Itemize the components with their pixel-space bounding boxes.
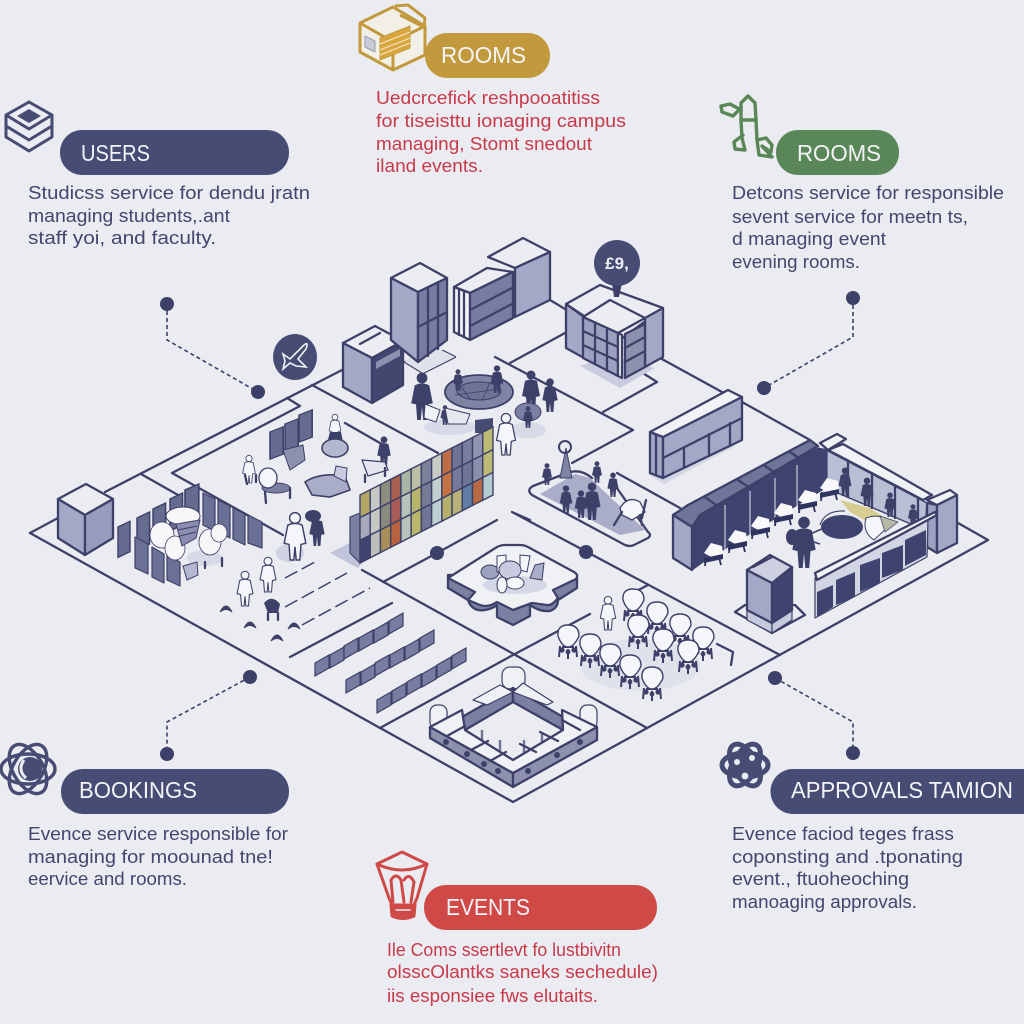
cabinet: grid locker xyxy=(391,263,455,373)
posts xyxy=(482,730,542,753)
chair block xyxy=(558,589,733,701)
row 1 xyxy=(315,613,403,676)
pill heading: USERS xyxy=(81,140,150,166)
description: staff yoi, and faculty. xyxy=(28,228,216,248)
tower cabinet xyxy=(735,555,805,633)
description: evening rooms. xyxy=(732,252,860,272)
seat top xyxy=(430,710,597,773)
description: olsscOlantks saneks sechedule) xyxy=(387,962,658,982)
description: iis esponsiee fws elutaits. xyxy=(387,986,598,1006)
box: double door cabinet xyxy=(566,285,663,388)
description: event., ftuoheoching xyxy=(732,869,909,889)
connector nodes on the floor xyxy=(430,545,593,560)
description: manoaging approvals. xyxy=(732,892,917,912)
platform top xyxy=(448,545,577,610)
box: mailbox cabinet xyxy=(343,326,403,403)
wall: coloured locker grid xyxy=(330,427,493,568)
description: managing students,.ant xyxy=(28,206,230,226)
connector: users xyxy=(160,297,265,399)
description xyxy=(387,940,658,1006)
outlets xyxy=(443,739,583,774)
pill heading: APPROVALS TAMION xyxy=(791,777,1013,803)
description xyxy=(376,88,626,176)
icon: atom xyxy=(1,738,55,800)
corner chairs xyxy=(502,667,525,689)
icon: price bubble xyxy=(594,240,640,297)
description: d managing event xyxy=(732,229,886,249)
icon: molecule xyxy=(722,739,768,791)
panel: users xyxy=(6,102,310,248)
description xyxy=(28,183,310,248)
puzzle platform with meeting table xyxy=(448,545,577,625)
end post xyxy=(927,490,957,553)
platform side xyxy=(448,575,577,625)
connector: approvals xyxy=(768,671,860,760)
icon: price bubble: £9, xyxy=(605,254,629,273)
row 3 xyxy=(377,648,466,713)
description: Studicss service for dendu jratn xyxy=(28,183,310,203)
pill heading xyxy=(425,33,550,78)
description xyxy=(28,824,288,889)
icon: open box xyxy=(360,5,425,70)
people: walkway xyxy=(220,510,325,641)
connector: bookings xyxy=(160,670,257,761)
front sides xyxy=(430,727,597,787)
description: Detcons service for responsible xyxy=(732,183,1004,203)
description: eervice and rooms. xyxy=(28,869,187,889)
pill heading: EVENTS xyxy=(446,894,530,920)
pill heading xyxy=(776,130,899,175)
panel: events xyxy=(377,852,658,1006)
pill heading xyxy=(424,885,657,930)
description: Evence service responsible for xyxy=(28,824,288,844)
panel: approvals xyxy=(722,739,1024,912)
meeting cluster xyxy=(481,555,547,594)
pill heading: ROOMS xyxy=(441,42,526,68)
panel: rooms gold xyxy=(360,5,626,176)
seating rows xyxy=(315,613,466,713)
description: Evence faciod teges frass xyxy=(732,824,954,844)
wall: storage xyxy=(648,390,742,484)
description: managing for moounad tne! xyxy=(28,847,273,867)
description: sevent service for meetn ts, xyxy=(732,207,968,227)
description xyxy=(732,183,1004,272)
central table xyxy=(786,500,898,568)
icon: light bulb xyxy=(377,852,427,918)
room: right classroom xyxy=(673,434,957,618)
panel: rooms green xyxy=(721,96,1004,272)
description: managing, Stomt snedout xyxy=(376,134,592,154)
description: Ile Coms ssertlevt fo lustbivitn xyxy=(387,940,621,960)
floor outline and room dividers xyxy=(30,300,988,802)
inner walls xyxy=(462,688,513,730)
pill heading xyxy=(60,130,289,175)
icon: bamboo branch xyxy=(721,96,772,157)
isometric floor plan xyxy=(30,238,988,802)
cabinet: back block xyxy=(488,238,550,317)
icon: layered stack xyxy=(6,102,52,151)
description xyxy=(732,824,963,912)
pill heading xyxy=(61,769,289,814)
pill heading: BOOKINGS xyxy=(79,777,197,803)
cabinet: shelf unit xyxy=(454,268,513,340)
description: for tiseisttu ionaging campus xyxy=(376,111,626,131)
square bench xyxy=(430,667,597,787)
icon: plane bubble xyxy=(273,334,317,380)
room: left huddle booths xyxy=(118,484,262,586)
box: left cube xyxy=(58,484,113,555)
description: Uedcrcefick reshpooatitiss xyxy=(376,88,600,108)
room: people platform xyxy=(529,441,650,546)
room: round table lounge xyxy=(411,365,558,455)
pill heading xyxy=(770,769,1024,814)
dashed aisle lines xyxy=(285,562,370,625)
description: iland events. xyxy=(376,156,483,176)
back wall panels xyxy=(820,434,932,530)
pill heading: ROOMS xyxy=(797,140,881,166)
connector: rooms right xyxy=(757,291,860,395)
dark partition wall xyxy=(673,440,839,570)
panel: bookings xyxy=(1,738,289,889)
room: upper-left seating xyxy=(243,410,391,503)
row 2 xyxy=(346,630,434,693)
description: coponsting and .tponating xyxy=(732,847,963,867)
front low wall xyxy=(815,512,937,618)
